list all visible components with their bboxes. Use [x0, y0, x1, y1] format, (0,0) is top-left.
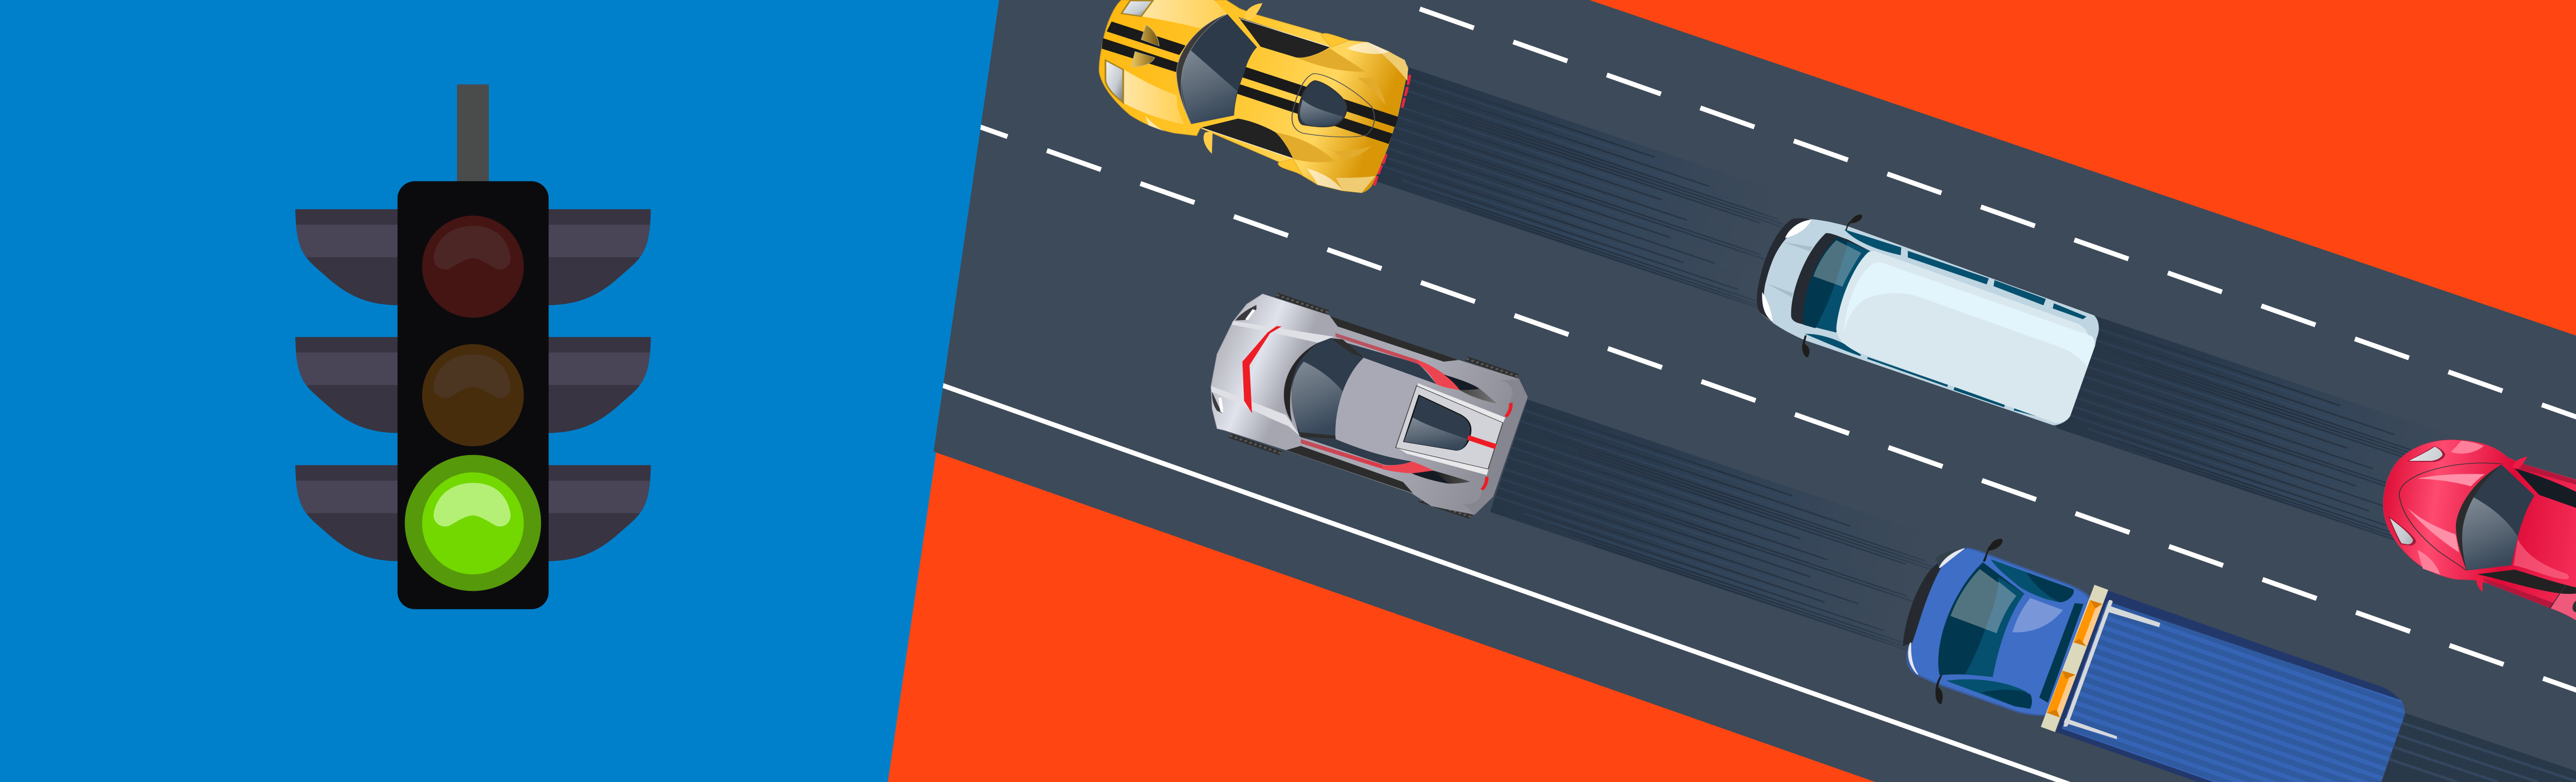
amber lamp (off)	[422, 344, 524, 446]
green lamp (lit)	[405, 455, 541, 591]
dashed lane divider: upper	[1420, 9, 2576, 455]
pole	[457, 85, 489, 182]
rear panels	[2551, 485, 2576, 640]
side sills	[1286, 316, 1459, 493]
rear deck	[1396, 386, 1503, 469]
fender highlights	[2417, 441, 2484, 575]
hood highlight	[2012, 598, 2063, 633]
hood bands	[1211, 321, 1334, 437]
side windows	[1946, 559, 2073, 709]
traffic light	[295, 85, 651, 609]
blue panel	[0, 0, 999, 782]
rear window	[1292, 74, 1375, 137]
racing stripes	[1101, 22, 1398, 144]
mirrors	[1204, 3, 1262, 154]
roof	[1336, 358, 1436, 461]
hood vents	[1131, 25, 1159, 66]
bumper	[1903, 561, 1941, 646]
rear fenders	[1278, 34, 1349, 175]
windshield	[2456, 465, 2534, 571]
body	[1211, 294, 1528, 514]
red hood stripe	[1242, 326, 1281, 413]
rear deck trim strips	[1397, 383, 1505, 475]
trail behind blue truck	[2382, 713, 2576, 782]
side windows	[1805, 229, 2087, 419]
hood highlights	[1141, 0, 1227, 28]
side shading	[2483, 463, 2576, 608]
headlights	[1762, 220, 1811, 322]
mirrors	[1802, 214, 1862, 357]
windshield	[1791, 233, 1871, 332]
windshield	[1176, 14, 1257, 124]
blue truck	[1903, 539, 2405, 782]
side openings	[2515, 468, 2576, 522]
trail behind white van	[2056, 315, 2501, 564]
windshield	[1284, 338, 1364, 437]
solid road edge line	[940, 382, 2071, 782]
housing	[398, 181, 549, 609]
body highlights	[1145, 42, 1389, 191]
hood creases	[1767, 242, 1812, 297]
bumper	[1757, 218, 1811, 323]
road surface	[934, 0, 2576, 782]
headlight lenses	[2390, 447, 2443, 544]
cargo bed	[2056, 590, 2405, 782]
rear window	[1404, 395, 1471, 450]
body	[1099, 0, 1408, 193]
cargo ribs	[2062, 602, 2405, 782]
rear lights	[1482, 403, 1511, 490]
side windows and pillars	[1301, 338, 1436, 465]
side vents	[1239, 17, 1330, 58]
red lamp (off)	[422, 215, 524, 318]
white van	[1757, 214, 2099, 425]
visor shades	[295, 209, 651, 561]
rear bumper	[1463, 379, 1528, 514]
red side stripes	[1301, 333, 1418, 469]
rear cab slit	[2039, 603, 2083, 703]
wheels	[1230, 295, 1518, 517]
side vents	[2572, 496, 2576, 615]
headlights	[1122, 1, 1153, 16]
orange roof bars	[2047, 600, 2103, 718]
yellow sports car	[1099, 0, 1410, 193]
cab	[1908, 548, 2091, 715]
cream beam	[2041, 585, 2108, 732]
hood highlights	[2408, 474, 2485, 553]
windshield	[1938, 562, 2024, 677]
door seams	[2550, 484, 2576, 608]
red sports car	[2383, 440, 2576, 640]
roof	[1836, 251, 2095, 423]
roof highlight	[1844, 262, 2094, 366]
trail behind silver car	[1490, 400, 1963, 658]
van body	[1757, 219, 2099, 425]
roof highlight	[2514, 540, 2569, 579]
red deck stripe	[1467, 435, 1497, 449]
body	[2383, 440, 2576, 640]
grey rail and brackets	[2063, 600, 2160, 739]
tail lights	[1375, 76, 1410, 185]
body shading	[1276, 48, 1385, 162]
headlight housings	[2388, 446, 2445, 545]
trail behind yellow car	[1370, 67, 1815, 315]
headlights	[1212, 305, 1257, 413]
mirrors	[2477, 457, 2528, 592]
rear corner panels	[1336, 42, 1408, 193]
hood seam	[2399, 463, 2502, 571]
headlights	[1909, 548, 1964, 674]
silver sports car	[1211, 294, 1528, 517]
intakes	[1412, 375, 1480, 484]
dashed lane divider: lower	[953, 118, 2576, 728]
mirrors	[1936, 539, 2003, 704]
